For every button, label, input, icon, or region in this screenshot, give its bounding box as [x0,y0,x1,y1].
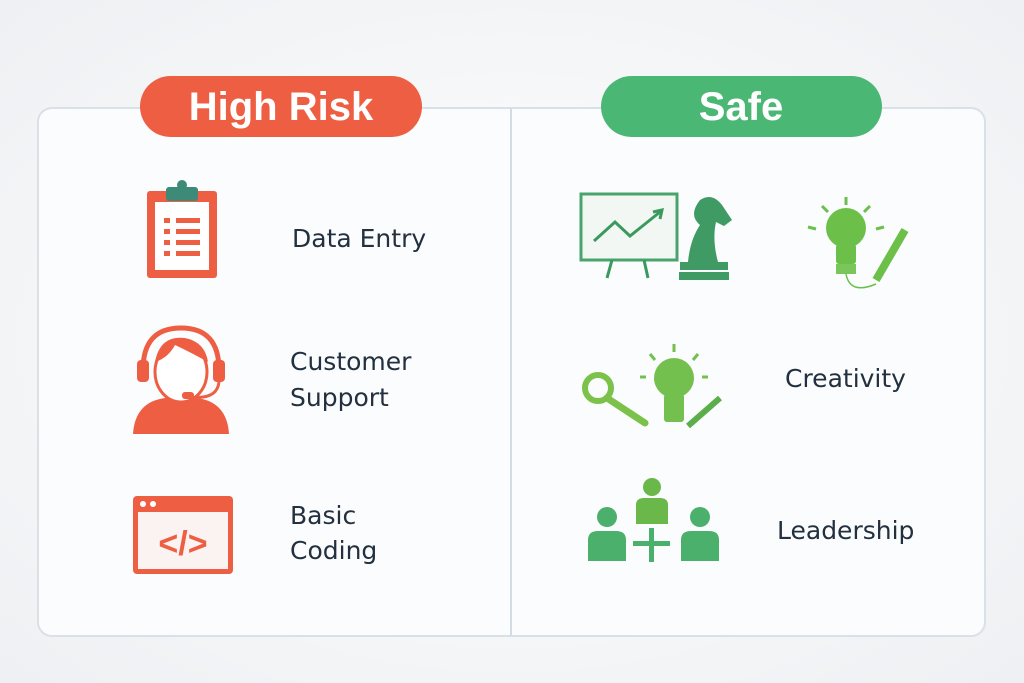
icon: headset person [133,328,229,434]
heading: High Risk [140,76,422,137]
heading: Safe: Safe [699,85,783,129]
text: Customer Support: Customer [290,347,412,376]
icon: clipboard [147,180,217,278]
icon: magnifier lightbulb pencil [585,344,720,426]
text: Creativity: Creativity [785,364,906,393]
icon: strategy chart and knight [581,194,732,280]
text: Basic Coding: Basic [290,501,356,530]
icon: team leadership [588,478,719,562]
icon: lightbulb and pencil [808,197,905,288]
text: Leadership: Leadership [777,516,914,545]
text: Customer Support: Support [290,383,389,412]
text: Basic Coding: Coding [290,536,377,565]
icon: code window [133,496,233,574]
heading: Safe [601,76,882,137]
text: Data Entry: Data Entry [292,224,426,253]
panel: comparison box [38,108,985,636]
heading: High Risk: High Risk [189,85,374,129]
icon: code window: </> [158,525,208,563]
